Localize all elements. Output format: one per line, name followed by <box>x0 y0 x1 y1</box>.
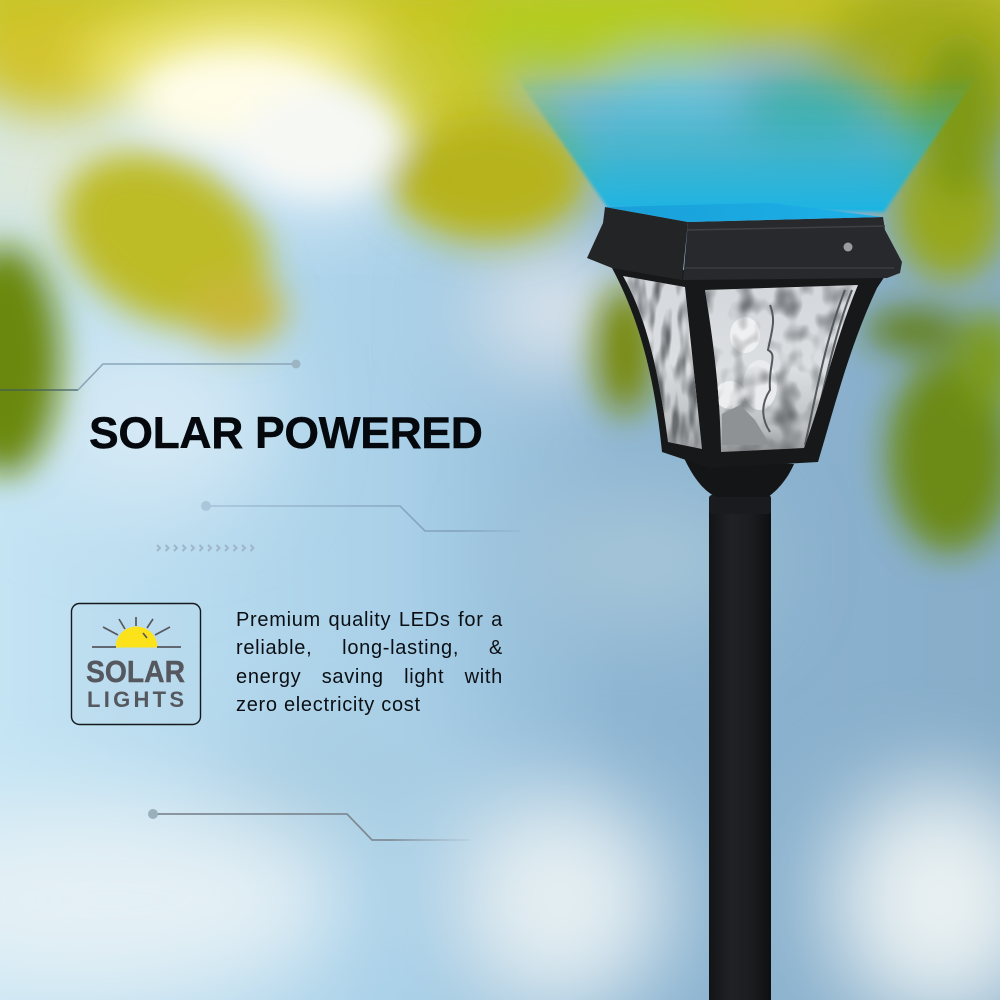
solar panel <box>605 203 883 222</box>
badge text: lights: LIGHTS <box>87 687 184 712</box>
solar lamp <box>587 203 902 1000</box>
sensor dot <box>844 242 852 252</box>
line lower <box>148 809 470 840</box>
chevron row <box>157 545 254 551</box>
lamp body frame <box>612 268 885 468</box>
light beam above solar panel <box>515 75 978 212</box>
description text: reliable, long-lasting, & <box>236 637 503 659</box>
line top <box>0 360 300 390</box>
glass right <box>700 284 860 454</box>
description text: energy saving light with <box>236 666 503 688</box>
glass left <box>623 276 702 449</box>
badge text: solar: SOLAR <box>86 654 185 689</box>
description text: zero electricity cost <box>236 694 421 716</box>
lamp cap <box>587 203 902 280</box>
title: SOLAR POWERED <box>89 409 482 458</box>
icon: sun <box>92 617 181 648</box>
description text <box>236 609 503 716</box>
lamp base <box>684 458 794 497</box>
pole <box>709 495 771 1000</box>
description text: Premium quality LEDs for a <box>236 609 503 631</box>
line middle <box>201 501 520 531</box>
